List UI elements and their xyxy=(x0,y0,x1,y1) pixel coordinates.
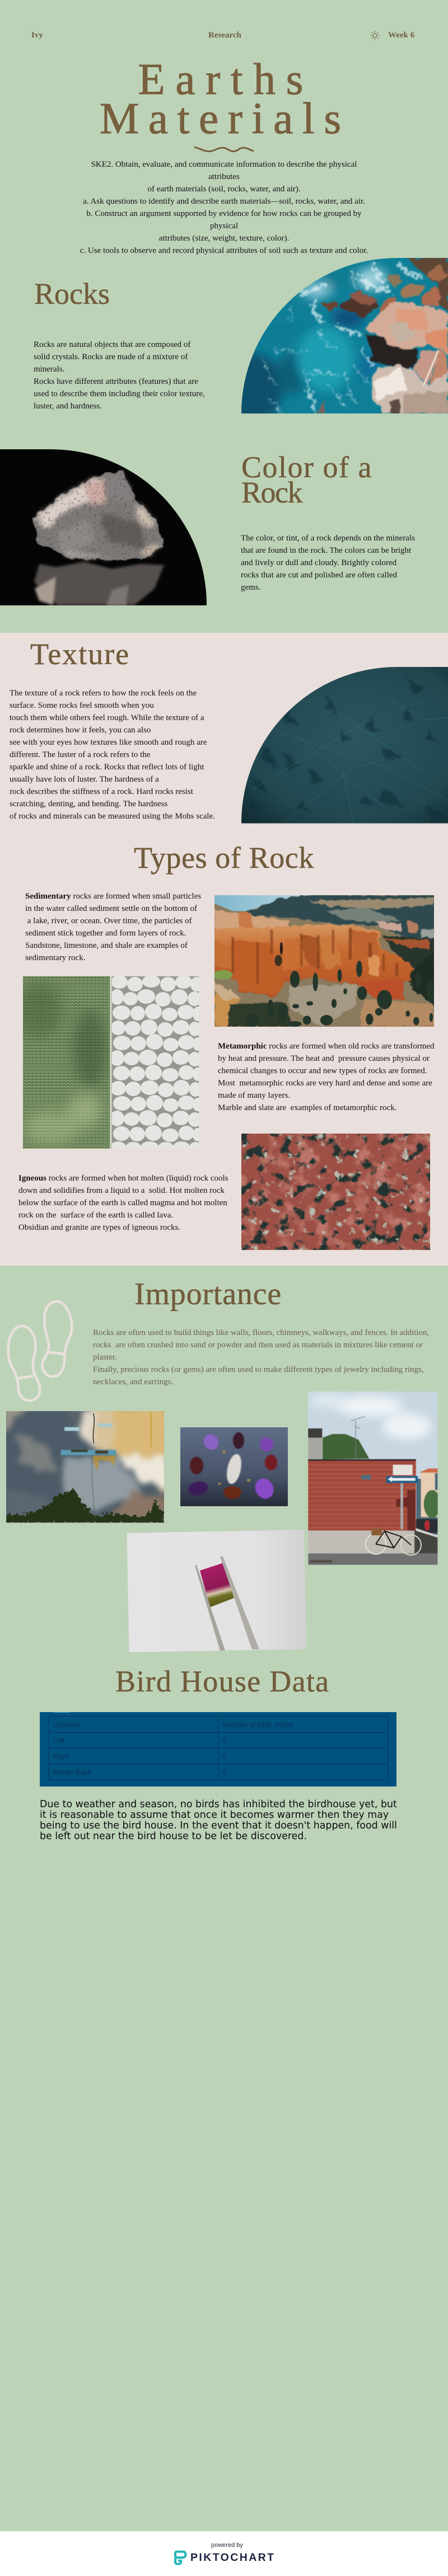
table: number of birds by location: Right xyxy=(53,1752,69,1760)
title: Materials xyxy=(100,95,351,143)
heading: Types of Rock: Types of Rock xyxy=(134,841,314,875)
table: number of birds by location xyxy=(40,1712,396,1787)
title: Earths xyxy=(138,55,314,104)
table: number of birds by location: Number of birds Inhibit xyxy=(222,1721,293,1729)
title xyxy=(100,55,351,143)
heading: Color of a Rock xyxy=(241,450,372,509)
table: number of birds by location: Location xyxy=(53,1721,80,1729)
table: number of birds by location: 0 xyxy=(222,1769,226,1776)
icon: sun xyxy=(371,31,380,40)
photo: brick building with bicycle xyxy=(308,1392,438,1565)
text: bird house observation: Due to weather and season, no birds has inhibited the birdhouse yet, but it is reasonable to assume that once it becomes warmer then they may being to use the bird house. In the event that it doesn't happen, food will be left out near the bird house to be let be discovered. xyxy=(40,1799,397,1842)
photo: purple gems on slate xyxy=(180,1427,288,1506)
standards text block: SKE2. Obtain, evaluate, and communicate information to describe the physical attributes of earth materials (soil, rocks, water, and air). a. Ask questions to identify and describe earth materials—soil, rocks, water, and air. b. Construct an argument supported by evidence for how rocks can be grouped by physical attributes (size, weight, texture, color). c. Use tools to observe and record physical attributes of soil such as texture and color. xyxy=(80,160,368,255)
icon: footprints xyxy=(7,1300,73,1402)
footer caption: powered by xyxy=(211,2542,243,2549)
heading: Importance: Importance xyxy=(134,1277,282,1311)
wavy title underline xyxy=(194,147,254,152)
photo: grey rock on black with reflection xyxy=(0,449,207,605)
table: number of birds by location: Middle Back xyxy=(53,1769,92,1776)
photo: weathered concrete wall xyxy=(6,1411,164,1523)
panel: importance xyxy=(0,1266,448,1656)
text: why rocks matter: Rocks are often used to build things like walls, floors, chimneys, walkways, and fences. In addition, rocks are often crushed into sand or powder and then used as materials in mixtures like cement or plaster. Finally, precious rocks (or gems) are often used to make different types of jewelry including rings, necklaces, and earrings. xyxy=(93,1328,429,1386)
heading: Texture: Texture xyxy=(30,637,130,671)
header label: Week 6: Week 6 xyxy=(388,31,414,40)
table: number of birds by location: Left xyxy=(53,1737,65,1745)
panel: texture and types of rock xyxy=(0,633,448,1266)
photo: red granite xyxy=(241,1134,430,1250)
text: rocks description: Rocks are natural objects that are composed of solid crystals. Rocks are made of a mixture of minerals. Rocks have different attributes (features) that are used to describe them including their color texture, luster, and hardness. xyxy=(34,340,205,411)
photo: dark teal rock texture xyxy=(241,667,448,824)
logo wordmark: PIKTOCHART xyxy=(190,2551,275,2564)
photo: green tiles and white pebbles xyxy=(23,976,199,1149)
heading: Color of a Rock: Color of a xyxy=(241,450,372,484)
header label: Ivy: Ivy xyxy=(31,31,43,40)
text: metamorphic rocks: Metamorphic rocks are formed when old rocks are transformed by heat and pressure. The heat and pressure causes physical or chemical changes to occur and new types of rocks are formed. Most metamorphic rocks are very hard and dense and some are made of many layers. Marble and slate are examples of metamorphic rock. xyxy=(218,1042,435,1112)
text: texture description: The texture of a rock refers to how the rock feels on the surface. Some rocks feel smooth when you touch them while others feel rough. While the texture of a rock determines how it feels, you can also see with your eyes how textures like smooth and rough are different. The luster of a rock refers to the sparkle and shine of a rock. Rocks that reflect lots of light usually have lots of luster. The hardness of a rock describes the stiffness of a rock. Hard rocks resist scratching, denting, and bending. The hardness of rocks and minerals can be measured using the Mohs scale. xyxy=(10,689,215,821)
photo: gem held by tweezers xyxy=(127,1530,306,1652)
footer: powered by Piktochart xyxy=(0,2531,448,2576)
header label: Research: Research xyxy=(208,31,241,40)
heading: Bird House Data: Bird House Data xyxy=(115,1665,329,1698)
table: number of birds by location: 0 xyxy=(222,1752,226,1760)
photo: aerial coast with rocks xyxy=(241,258,448,413)
icon: Piktochart logo xyxy=(174,2550,187,2565)
table: number of birds by location: 0 xyxy=(222,1737,226,1745)
text: sedimentary rocks: Sedimentary rocks are formed when small particles in the water called sediment settle on the bottom of a lake, river, or ocean. Over time, the particles of sediment stick together and form layers of rock. Sandstone, limestone, and shale are examples of sedimentary rock. xyxy=(25,892,201,962)
text: igneous rocks: Igneous rocks are formed when hot molten (liquid) rock cools down and solidifies from a liquid to a solid. Hot molten rock below the surface of the earth is called magma and hot molten rock on the surface of the earth is called lava. Obsidian and granite are types of igneous rocks. xyxy=(18,1174,228,1232)
panel: bird house data xyxy=(0,1656,448,2531)
heading: Rocks: Rocks xyxy=(34,277,110,311)
text: color of a rock description: The color, or tint, of a rock depends on the minerals that are found in the rock. The colors can be bright and lively or dull and cloudy. Brightly colored rocks that are cut and polished are often called gems. xyxy=(241,534,415,592)
heading: Color of a Rock: Rock xyxy=(241,476,302,509)
photo: orange canyon hoodoos xyxy=(214,895,434,1027)
panel: introduction, rocks and color of a rock xyxy=(0,0,448,633)
